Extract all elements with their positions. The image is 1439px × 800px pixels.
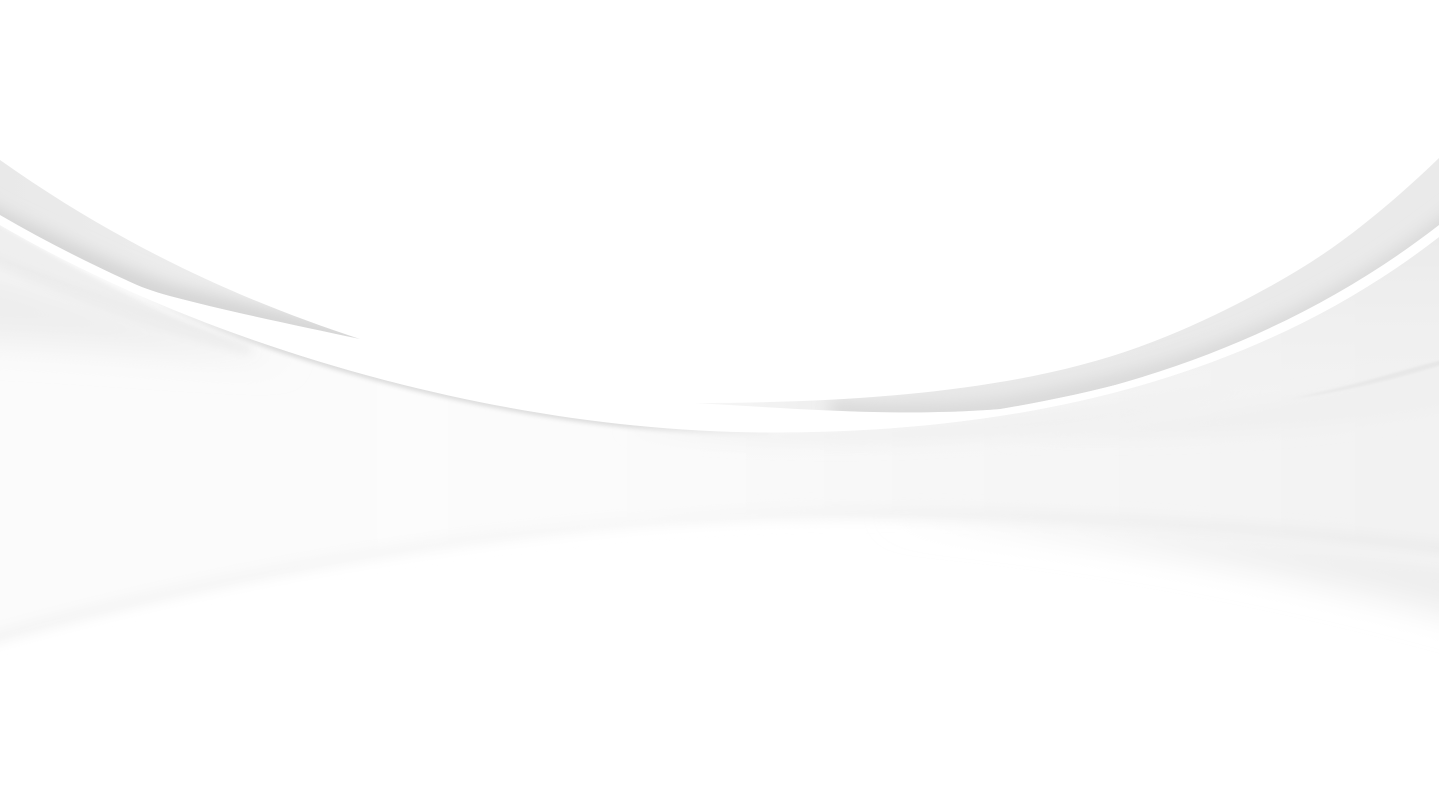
sliver inner shade [0, 200, 360, 341]
right upper panel shade [700, 190, 1439, 470]
dark line hugging ribbon [180, 312, 720, 433]
upper right grey sliver [703, 158, 1439, 412]
centre shadow under ribbon [620, 385, 1250, 442]
soft grey beneath right fold [1000, 360, 1439, 437]
right fold line [1354, 362, 1439, 386]
band lower edge shade [0, 513, 1439, 654]
left pale strip under ribbon [0, 226, 146, 308]
sliver base [0, 160, 278, 310]
left soft streak [0, 248, 250, 350]
upper left grey sliver [0, 160, 359, 339]
sliver inner shade [830, 200, 1439, 415]
background artwork: white curved waves [0, 158, 1439, 638]
band fill [984, 416, 1439, 537]
white curved ribbon [0, 191, 1439, 433]
left soft shade below streak [0, 276, 174, 344]
mid grey band [0, 226, 1439, 638]
sliver base [703, 158, 1439, 410]
right lower soft fade [1124, 535, 1439, 613]
